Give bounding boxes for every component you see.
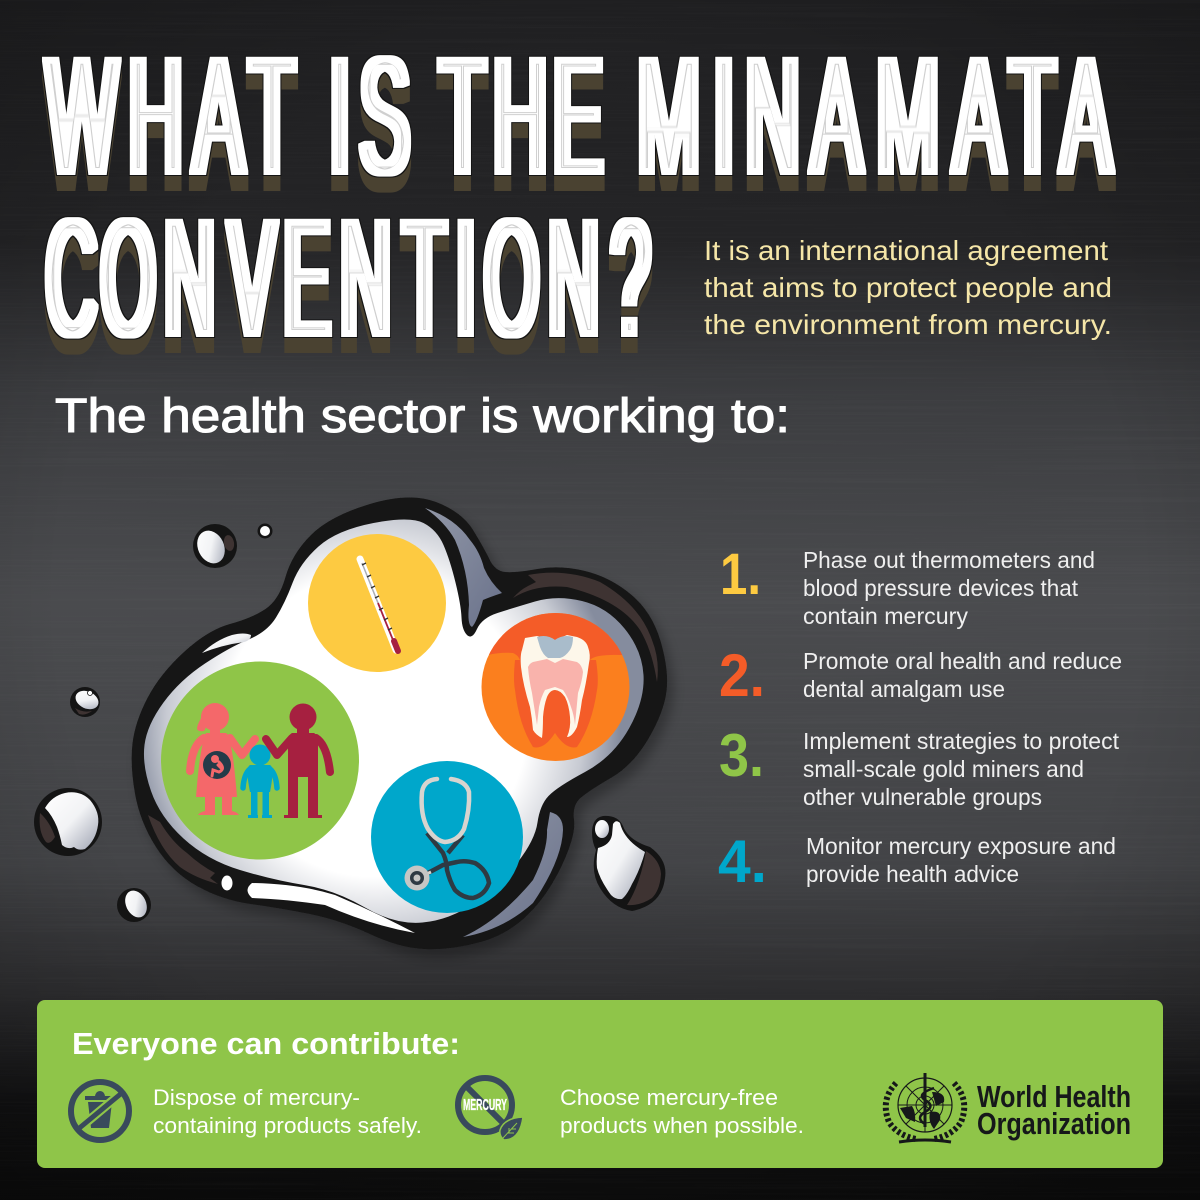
emblem bbox=[886, 1073, 964, 1142]
list item 1 bbox=[720, 542, 1095, 629]
list item 4: provide health advice bbox=[806, 861, 1019, 887]
pool outline bbox=[132, 497, 667, 949]
list item 1: 1. bbox=[720, 542, 761, 607]
title bbox=[46, 23, 1111, 370]
bottom left brown reflection bbox=[148, 815, 218, 884]
list item 4 bbox=[718, 828, 1116, 895]
top steel reflection bbox=[425, 508, 502, 627]
logo wordmark: World Health bbox=[977, 1079, 1131, 1114]
dispose text: Dispose of mercury- bbox=[153, 1085, 360, 1110]
father bbox=[266, 704, 330, 818]
intro text: It is an international agreement bbox=[704, 235, 1108, 266]
logo wordmark bbox=[977, 1079, 1131, 1141]
droplet: pear shaped bbox=[592, 816, 665, 911]
heading: The health sector is working to: bbox=[55, 390, 790, 443]
white highlights bbox=[202, 634, 415, 933]
list item 1: blood pressure devices that bbox=[803, 575, 1079, 601]
choose text: Choose mercury-free bbox=[560, 1085, 778, 1110]
fetus bbox=[203, 751, 231, 779]
droplet: left small bbox=[70, 687, 101, 717]
circle: family bbox=[161, 662, 359, 860]
list item 3: other vulnerable groups bbox=[803, 784, 1042, 810]
list item 3: 3. bbox=[719, 722, 764, 789]
title: WHAT IS THE MINAMATA bbox=[47, 23, 1111, 209]
icon: mercury free: MERCURY bbox=[463, 1097, 507, 1114]
droplet: lower left bbox=[117, 887, 151, 922]
list item 4: 4. bbox=[718, 828, 767, 895]
icon: mercury free bbox=[458, 1078, 523, 1140]
dispose text: containing products safely. bbox=[153, 1113, 422, 1138]
panel heading: Everyone can contribute: bbox=[72, 1026, 460, 1061]
list item 4: Monitor mercury exposure and bbox=[806, 833, 1116, 859]
logo wordmark: Organization bbox=[977, 1106, 1131, 1141]
logo: World Health Organization bbox=[886, 1073, 1131, 1142]
list item 3 bbox=[719, 722, 1120, 810]
dispose text bbox=[153, 1085, 422, 1138]
circle: thermometer bbox=[308, 534, 446, 672]
list item 2: Promote oral health and reduce bbox=[803, 648, 1122, 674]
top right brown reflection bbox=[513, 573, 658, 682]
droplet: tiny bbox=[258, 524, 272, 538]
list item 1: contain mercury bbox=[803, 603, 968, 629]
mercury pool illustration bbox=[132, 497, 667, 949]
choose text bbox=[560, 1085, 804, 1138]
intro text: that aims to protect people and bbox=[704, 272, 1112, 303]
list item 2 bbox=[719, 642, 1122, 709]
intro text: the environment from mercury. bbox=[704, 309, 1112, 340]
intro text bbox=[704, 235, 1112, 340]
pool surface bbox=[144, 520, 644, 923]
list item 3: small-scale gold miners and bbox=[803, 756, 1084, 782]
bottom right steel reflection bbox=[463, 812, 563, 937]
droplet: left large bbox=[34, 788, 102, 856]
mother bbox=[190, 703, 255, 815]
child bbox=[243, 744, 277, 818]
circle: stethoscope bbox=[371, 761, 523, 913]
list item 1: Phase out thermometers and bbox=[803, 547, 1095, 573]
list item 2: 2. bbox=[719, 642, 765, 709]
list item 2: dental amalgam use bbox=[803, 676, 1005, 702]
panel: everyone can contribute bbox=[37, 1000, 1163, 1168]
choose text: products when possible. bbox=[560, 1113, 804, 1138]
circle: tooth bbox=[482, 613, 630, 761]
list item 3: Implement strategies to protect bbox=[803, 728, 1120, 754]
icon: no trash bbox=[71, 1082, 129, 1140]
droplet: top left bbox=[192, 524, 237, 568]
title: CONVENTION? bbox=[46, 185, 650, 370]
